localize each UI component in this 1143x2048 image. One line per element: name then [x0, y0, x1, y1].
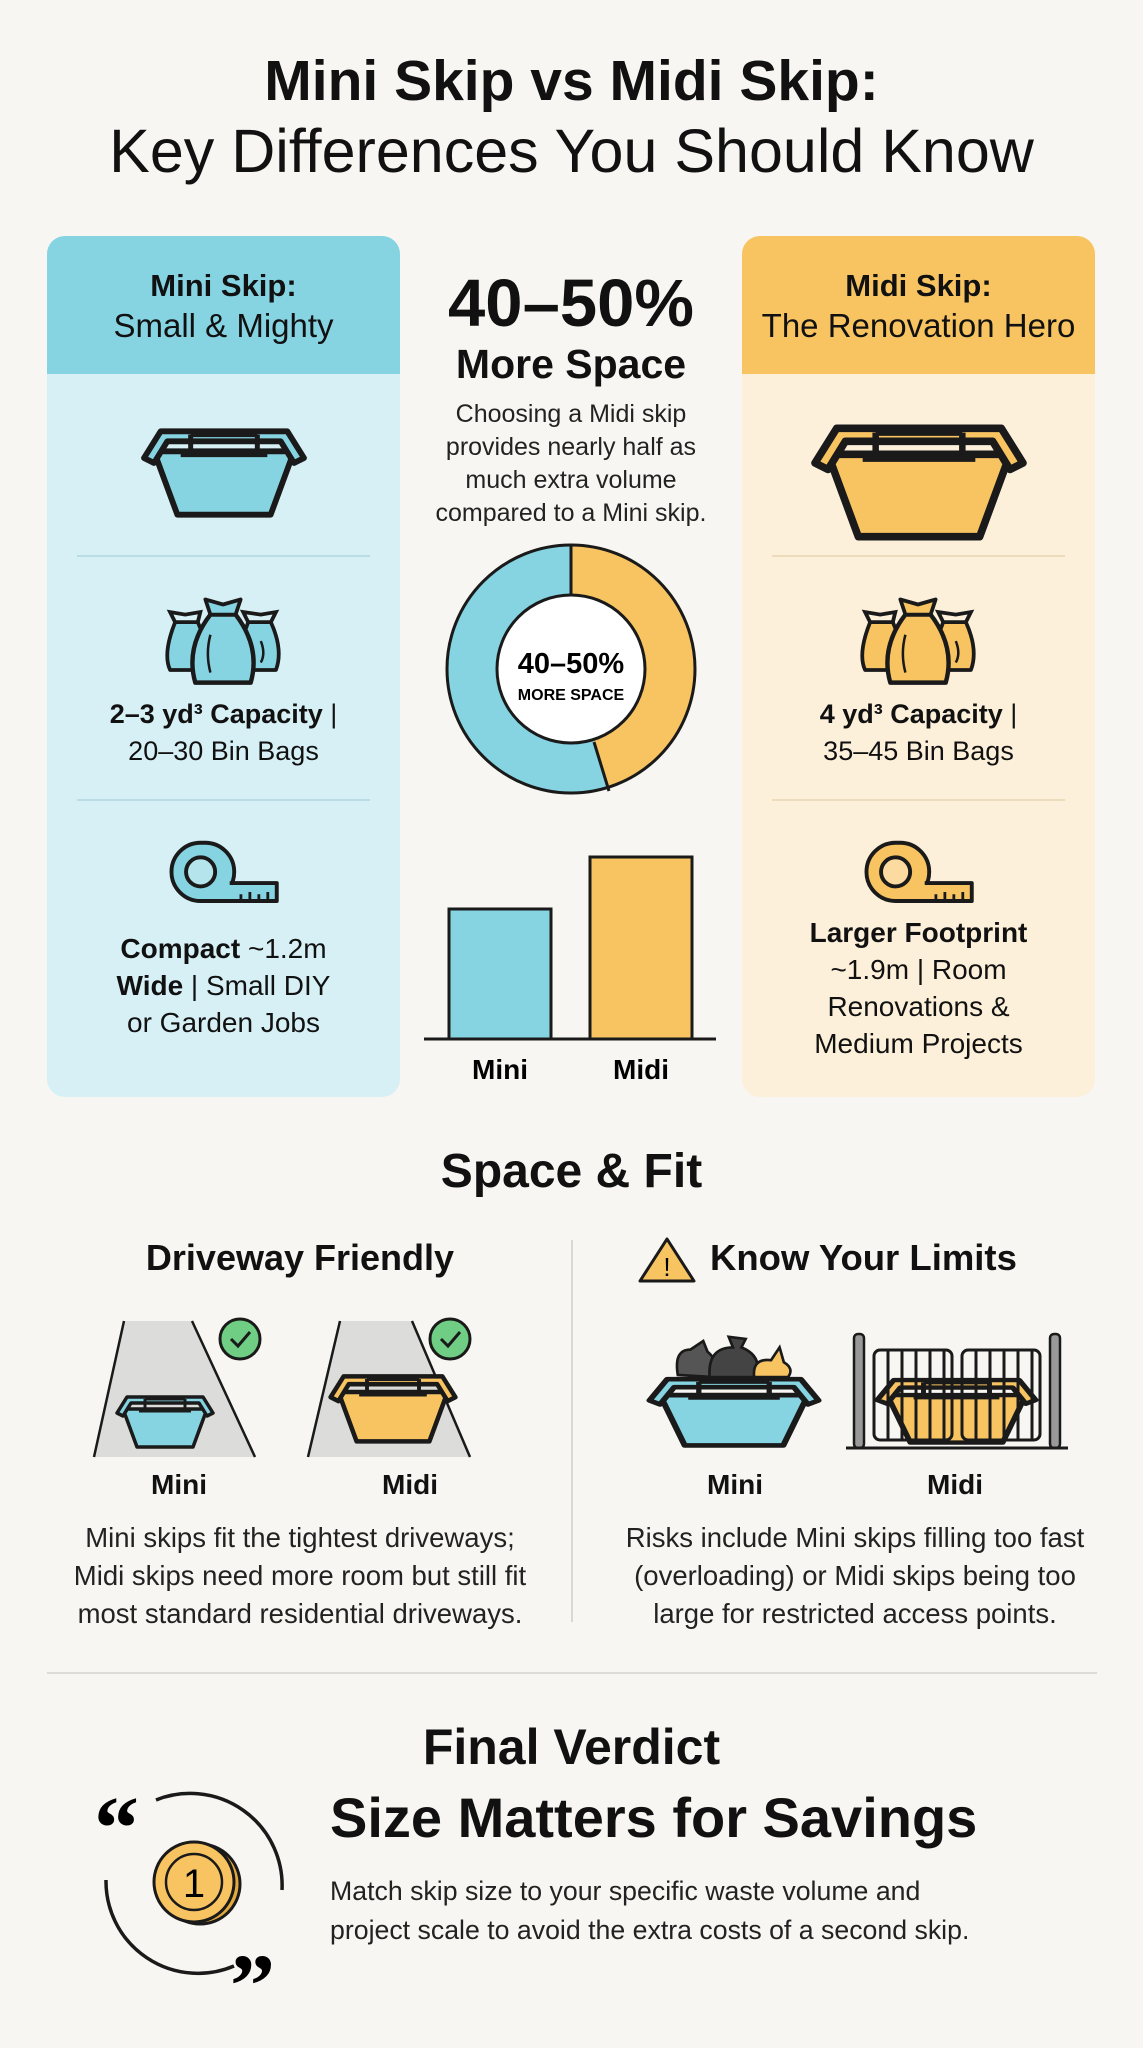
panel: mini skip — [47, 236, 400, 1097]
bar chart: Mini — [472, 1054, 528, 1085]
size text: mini: Compact ~1.2m — [120, 933, 327, 964]
text: limits — [626, 1522, 1084, 1629]
section: know your limits: Midi — [927, 1469, 983, 1500]
panel header: mini — [47, 236, 400, 374]
title — [109, 49, 1034, 185]
panel header: midi: The Renovation Hero — [762, 307, 1075, 344]
size text: midi: ~1.9m | Room — [830, 954, 1007, 985]
section: driveway friendly — [74, 1237, 526, 1629]
section: know your limits — [626, 1237, 1084, 1629]
center stat: More Space — [456, 341, 686, 387]
heading: know your limits: Know Your Limits — [710, 1237, 1017, 1278]
panel header: mini: Small & Mighty — [113, 307, 334, 344]
icon: driveways — [92, 1318, 472, 1458]
panel header: midi — [742, 236, 1095, 374]
capacity text: mini: 2–3 yd³ Capacity | — [110, 699, 337, 729]
verdict text: project scale to avoid the extra costs of a second skip. — [330, 1915, 969, 1945]
bar chart — [424, 856, 716, 1085]
capacity text: mini: 20–30 Bin Bags — [128, 736, 319, 766]
verdict text: Match skip size to your specific waste volume and — [330, 1876, 920, 1906]
text: driveway: Mini skips fit the tightest driveways; — [85, 1522, 515, 1553]
labels: Mini — [151, 1469, 207, 1500]
capacity text: midi: 4 yd³ Capacity | — [820, 699, 1017, 729]
icon: gate midi — [846, 1332, 1068, 1450]
size text: mini — [116, 933, 330, 1038]
labels: Mini — [707, 1469, 763, 1500]
title: Mini Skip vs Midi Skip: — [264, 49, 879, 113]
icon: bin bags midi — [860, 598, 976, 685]
panel header: midi: Midi Skip: — [845, 268, 992, 303]
heading: final verdict: Final Verdict — [423, 1719, 720, 1775]
capacity text: midi: 35–45 Bin Bags — [823, 736, 1014, 766]
text: driveway: Midi skips need more room but still fit — [74, 1560, 526, 1591]
size text: midi — [810, 917, 1027, 1059]
size text: midi: Medium Projects — [814, 1028, 1023, 1059]
icon: warning — [638, 1237, 696, 1282]
size text: midi: Larger Footprint — [810, 917, 1027, 948]
donut chart: 40–50% — [518, 648, 624, 680]
text: driveway — [74, 1522, 526, 1629]
icon: tape measure — [170, 840, 279, 903]
center stat: much extra volume — [465, 466, 677, 494]
section: driveway friendly: Midi — [382, 1469, 438, 1500]
size text: midi: Renovations & — [827, 991, 1010, 1022]
center stat: Choosing a Midi skip — [456, 400, 686, 428]
donut chart: MORE SPACE — [518, 687, 625, 704]
title: Key Differences You Should Know — [109, 117, 1034, 185]
verdict text — [330, 1786, 977, 1945]
capacity text: mini — [110, 699, 337, 766]
icon: tape measure midi — [864, 840, 974, 903]
center stat: compared to a Mini skip. — [436, 499, 706, 527]
donut chart — [446, 544, 696, 794]
icon: overloaded mini — [646, 1335, 822, 1448]
center stat: provides nearly half as — [446, 433, 696, 461]
icon: warning: ! — [663, 1252, 671, 1282]
text: driveway: most standard residential driveways. — [78, 1598, 522, 1629]
icon: quote coin — [94, 1780, 284, 1990]
center stat — [436, 266, 706, 527]
size text: mini: Wide | Small DIY — [117, 970, 330, 1001]
capacity text: midi — [820, 699, 1017, 766]
panel: midi skip — [742, 236, 1095, 1097]
bar chart: Midi — [613, 1054, 669, 1085]
icon: quote coin: “ — [94, 1780, 139, 1878]
icon: quote coin: 1 — [183, 1862, 205, 1906]
heading: space & fit: Space & Fit — [441, 1145, 702, 1198]
icon: midi skip — [811, 424, 1027, 540]
panel header: mini: Mini Skip: — [150, 268, 297, 303]
text: limits: (overloading) or Midi skips being too — [634, 1560, 1076, 1591]
verdict text: Size Matters for Savings — [330, 1786, 977, 1849]
size text: mini: or Garden Jobs — [127, 1007, 320, 1038]
text: limits: Risks include Mini skips filling too fast — [626, 1522, 1084, 1553]
icon: mini skip — [141, 428, 307, 518]
center stat: 40–50% — [448, 266, 694, 341]
text: limits: large for restricted access points. — [653, 1598, 1057, 1629]
icon: bin bags — [165, 598, 281, 685]
heading: driveway friendly: Driveway Friendly — [146, 1237, 454, 1278]
